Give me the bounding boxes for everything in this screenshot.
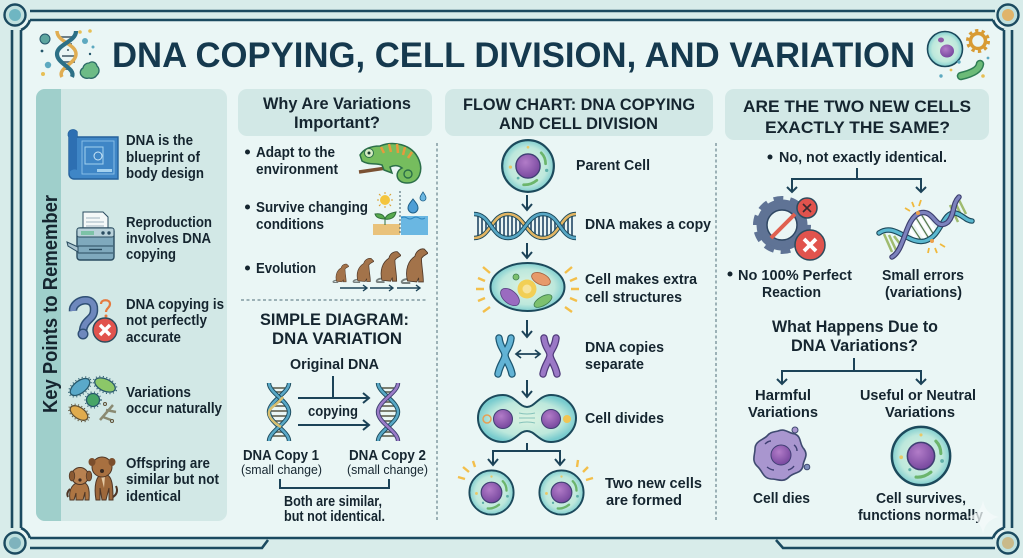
label: dna copy 2 <box>347 448 428 477</box>
text: variations <box>126 385 222 417</box>
label: dna copy 2: DNA Copy 2 <box>349 448 426 464</box>
step: cell makes extra structures <box>476 263 698 312</box>
text: offspring: identical <box>126 489 181 505</box>
tree arrows: variations <box>777 358 926 384</box>
label: harmful variations: Variations <box>748 405 818 421</box>
label: copying: copying <box>308 404 358 420</box>
label: no perfect reaction <box>728 268 852 301</box>
flow arrows <box>488 195 565 465</box>
step: two new cells: Two new cells <box>605 476 702 492</box>
icon: dying cell <box>754 427 810 480</box>
step: two new cells: are formed <box>606 493 682 509</box>
step: dna copies separate: DNA copies <box>585 340 664 356</box>
heading panel: same question <box>725 89 989 140</box>
text: blueprint: DNA is the <box>126 133 193 149</box>
key point 5: offspring <box>67 456 219 505</box>
title: DNA COPYING, CELL DIVISION, AND VARIATION <box>112 36 915 75</box>
bullet: survive: Survive changing <box>256 200 368 216</box>
text: blueprint: blueprint of <box>126 150 200 166</box>
heading panel: same question: ARE THE TWO NEW CELLS <box>743 97 971 116</box>
bullet: adapt <box>245 145 338 178</box>
icon: chameleon <box>359 144 421 183</box>
key point 3: not accurate <box>73 297 224 346</box>
icon: microbes <box>65 373 119 425</box>
bullet: survive: conditions <box>256 217 324 233</box>
text: variations: Variations <box>126 385 191 401</box>
icon: puppies <box>67 457 117 500</box>
corner ornament: top left <box>4 4 26 26</box>
text: reproduction: copying <box>126 247 176 263</box>
text: variations: occur naturally <box>126 401 222 417</box>
text: not accurate: DNA copying is <box>126 297 224 313</box>
label: small errors: Small errors <box>882 268 964 284</box>
icon: dna copy 2 <box>378 383 398 441</box>
bracket <box>280 479 389 488</box>
heading panel: same question: EXACTLY THE SAME? <box>765 118 950 137</box>
icon: question mark and error <box>73 300 117 342</box>
icon: broken gear <box>756 198 825 260</box>
bullet: survive <box>245 200 368 233</box>
label: small errors <box>882 268 964 301</box>
icon: sun, plant and water <box>373 191 428 235</box>
step: cell divides <box>478 395 664 442</box>
step: cell divides: Cell divides <box>585 411 664 427</box>
heading panel: flow chart: AND CELL DIVISION <box>499 114 658 133</box>
corner ornament: bottom left <box>4 532 26 554</box>
step: dna makes a copy <box>474 214 711 238</box>
label: no perfect reaction: Reaction <box>762 285 821 301</box>
label: dna copy 2: (small change) <box>347 463 428 477</box>
heading: what happens: What Happens Due to <box>772 317 938 336</box>
note: both similar <box>284 494 385 525</box>
icon: title DNA and microbes <box>40 29 99 78</box>
panel: key points to remember <box>36 89 227 521</box>
heading panel: why variations: Important? <box>294 113 380 132</box>
heading: simple diagram: SIMPLE DIAGRAM: <box>260 310 409 329</box>
panel heading: key points: Key Points to Remember <box>40 195 62 413</box>
label: harmful variations <box>748 388 818 421</box>
text: blueprint: body design <box>126 166 204 182</box>
heading panel: flow chart <box>445 89 713 136</box>
key point 4: microbes <box>65 373 222 425</box>
panel: are the two new cells the same <box>725 89 989 524</box>
note: both similar: but not identical. <box>284 509 385 525</box>
label: dna copy 1: DNA Copy 1 <box>243 448 319 464</box>
key point 1: blueprint <box>68 130 204 182</box>
label: dna copy 1 <box>241 448 322 477</box>
icon: evolving animals <box>333 249 428 283</box>
label: cell survives <box>858 491 983 524</box>
note: both similar: Both are similar, <box>284 494 382 510</box>
copying arrows <box>298 376 369 430</box>
panel: flow chart <box>445 89 713 515</box>
label: useful or neutral variations <box>860 388 976 421</box>
label: useful or neutral variations: Variations <box>885 405 955 421</box>
label: small errors: (variations) <box>885 285 962 301</box>
step: dna makes a copy: DNA makes a copy <box>585 217 711 233</box>
bullet: evolution: Evolution <box>256 261 316 277</box>
icon: title cell, gear and bacterium <box>928 30 989 78</box>
text: blueprint <box>126 133 204 182</box>
bullet: adapt: environment <box>256 162 338 178</box>
step: dna copies separate <box>498 338 664 374</box>
heading panel: why variations <box>238 89 432 136</box>
text: reproduction <box>126 215 212 263</box>
answer: not identical: No, not exactly identical. <box>779 150 947 166</box>
step: dna copies separate: separate <box>585 357 644 373</box>
text: offspring <box>126 456 219 505</box>
panel: simple diagram <box>241 310 428 525</box>
label: original dna: Original DNA <box>290 357 380 373</box>
heading: what happens <box>772 317 938 355</box>
label: useful or neutral variations: Useful or Neutral <box>860 388 976 404</box>
heading: simple diagram: DNA VARIATION <box>272 329 402 348</box>
step: cell makes extra structures: Cell makes extra <box>585 272 698 288</box>
text: not accurate: not perfectly <box>126 313 207 329</box>
heading: what happens: DNA Variations? <box>791 336 918 355</box>
label: cell survives: Cell survives, <box>876 491 966 507</box>
step: parent cell: Parent Cell <box>576 158 650 174</box>
label: no perfect reaction: No 100% Perfect <box>738 268 852 284</box>
icon: healthy cell <box>892 427 950 485</box>
heading: simple diagram <box>260 310 409 348</box>
step: cell makes extra structures: cell structures <box>585 290 682 306</box>
arrows: evolution progression <box>340 285 420 291</box>
icon: blueprint <box>68 130 118 179</box>
heading panel: why variations: Why Are Variations <box>263 94 411 113</box>
corner ornament: top right <box>998 4 1018 26</box>
heading panel: flow chart: FLOW CHART: DNA COPYING <box>463 95 695 114</box>
step: parent cell <box>502 140 650 192</box>
panel: why are variations important <box>238 89 432 291</box>
text: reproduction: involves DNA <box>126 231 211 247</box>
text: offspring: Offspring are <box>126 456 210 472</box>
label: dna copy 1: (small change) <box>241 463 322 477</box>
icon: dna copy 1 <box>269 383 289 441</box>
icon: photocopier <box>67 212 114 260</box>
corner ornament: bottom right <box>998 532 1018 554</box>
key point 2: copier <box>67 212 212 263</box>
label: harmful variations: Harmful <box>755 388 811 404</box>
text: offspring: similar but not <box>126 472 219 488</box>
tree arrows: answer <box>787 168 926 192</box>
bullet: adapt: Adapt to the <box>256 145 335 161</box>
step: two new cells <box>458 460 702 515</box>
text: not accurate: accurate <box>126 330 181 346</box>
text: not accurate <box>126 297 224 346</box>
icon: dna with errors <box>879 197 972 257</box>
label: cell dies: Cell dies <box>753 491 810 507</box>
label: cell survives: functions normally <box>858 508 983 524</box>
text: reproduction: Reproduction <box>126 215 212 231</box>
